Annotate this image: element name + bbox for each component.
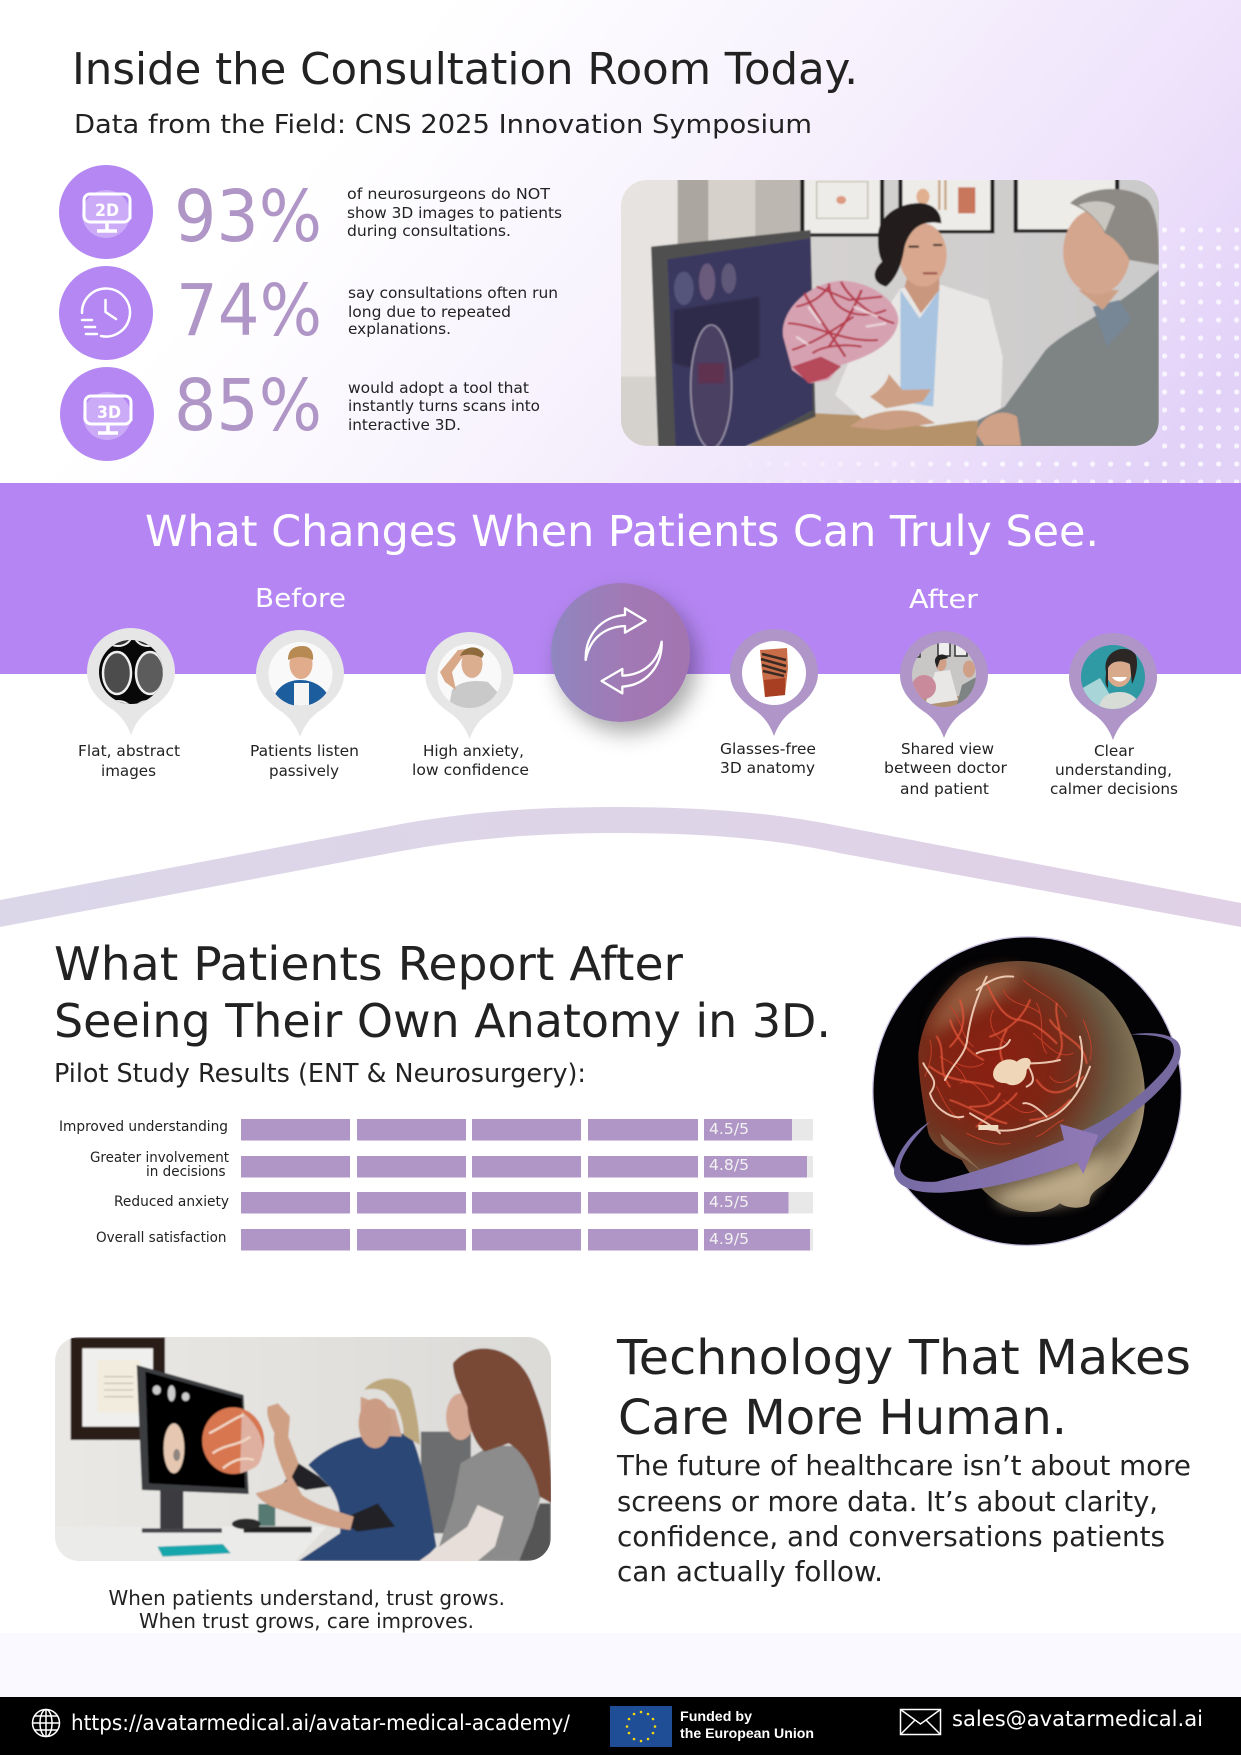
icon: 2D monitor: 2D xyxy=(95,201,119,221)
caption: Clear xyxy=(1094,742,1135,760)
caption xyxy=(1050,742,1178,798)
title: Inside the Consultation Room Today. xyxy=(72,44,858,95)
icon: globe xyxy=(32,1710,60,1736)
section heading: what patients report xyxy=(54,937,831,1048)
subheading: pilot study: Pilot Study Results (ENT & Neurosurgery): xyxy=(54,1059,586,1089)
caption xyxy=(884,740,1008,798)
caption xyxy=(412,742,529,779)
pin: anxious man xyxy=(426,632,514,739)
icon: 3D monitor xyxy=(60,367,154,461)
link: https://avatarmedical.ai/avatar-medical-academy/ xyxy=(71,1711,571,1736)
stat description: interactive 3D. xyxy=(348,416,461,434)
row: greater involvement: in decisions xyxy=(146,1164,226,1180)
paragraph xyxy=(616,1449,1191,1588)
caption: understanding, xyxy=(1055,761,1172,779)
photo: doctor explaining a brain model xyxy=(51,1333,557,1567)
purple band xyxy=(0,483,1241,674)
stat description xyxy=(348,284,558,338)
row: overall satisfaction xyxy=(96,1229,813,1250)
stat description: during consultations. xyxy=(347,222,511,240)
row: greater involvement: 4.8/5 xyxy=(709,1156,749,1174)
caption: trust message: When trust grows, care improves. xyxy=(139,1609,474,1633)
caption xyxy=(720,740,816,777)
paragraph: screens or more data. It’s about clarity, xyxy=(617,1485,1158,1518)
caption: Patients listen xyxy=(250,742,359,760)
row: improved understanding: 4.5/5 xyxy=(709,1120,749,1138)
caption: between doctor xyxy=(884,759,1008,777)
EU flag xyxy=(610,1706,672,1747)
stat: 85 percent xyxy=(60,364,540,461)
caption: Shared view xyxy=(901,740,994,758)
section heading: what patients report: Seeing Their Own Anatomy in 3D. xyxy=(54,994,831,1048)
row: overall satisfaction: Overall satisfaction xyxy=(96,1230,226,1246)
row: greater involvement: Greater involvement xyxy=(90,1150,229,1166)
label: before: Before xyxy=(255,584,346,614)
row: improved understanding: Improved understanding xyxy=(59,1119,228,1135)
section heading: what patients report: What Patients Report After xyxy=(54,937,683,991)
wave divider xyxy=(0,807,1241,927)
row: reduced anxiety: 4.5/5 xyxy=(709,1193,749,1211)
paragraph: confidence, and conversations patients xyxy=(617,1520,1165,1553)
stat description: explanations. xyxy=(348,320,451,338)
footer xyxy=(0,1697,1241,1755)
photo: doctor showing a 3D brain to a patient xyxy=(616,177,1164,450)
caption: and patient xyxy=(900,780,989,798)
icon: 2D monitor xyxy=(59,165,153,259)
paragraph: can actually follow. xyxy=(617,1555,883,1588)
before item: passive patient xyxy=(250,630,359,780)
pale strip above footer xyxy=(0,1633,1241,1697)
stat description: long due to repeated xyxy=(348,303,511,321)
stat description: show 3D images to patients xyxy=(347,204,562,222)
email: sales@avatarmedical.ai xyxy=(952,1707,1203,1732)
caption: Glasses-free xyxy=(720,740,816,758)
subtitle: Data from the Field: CNS 2025 Innovation Symposium xyxy=(74,110,812,140)
icon: 3D monitor: 3D xyxy=(97,403,121,423)
top section gradient background xyxy=(0,0,1241,483)
section heading: technology: Technology That Makes xyxy=(616,1330,1191,1386)
stat description: would adopt a tool that xyxy=(348,379,529,397)
row: reduced anxiety xyxy=(114,1192,813,1214)
pin: CT scan xyxy=(87,622,175,735)
pin: doctor and patient xyxy=(900,631,988,738)
section heading: technology: Care More Human. xyxy=(618,1390,1067,1446)
funded by text: the European Union xyxy=(680,1726,814,1741)
row: reduced anxiety: Reduced anxiety xyxy=(114,1194,229,1210)
after item: clear understanding xyxy=(1050,633,1178,798)
rating bar chart xyxy=(59,1119,813,1250)
section heading: technology xyxy=(616,1330,1191,1446)
after item: shared view xyxy=(884,631,1008,798)
caption: passively xyxy=(269,762,339,780)
stat: 74 percent xyxy=(59,266,558,360)
funded by text xyxy=(680,1709,814,1741)
icon: sync arrows xyxy=(586,608,662,693)
caption: Flat, abstract xyxy=(78,742,180,760)
stat value: 93% xyxy=(174,175,322,258)
stat description xyxy=(348,379,540,434)
after item: glasses-free anatomy xyxy=(720,629,818,777)
funded by text: Funded by xyxy=(680,1709,753,1724)
center transformation icon xyxy=(551,583,690,722)
stat description: of neurosurgeons do NOT xyxy=(347,185,551,203)
row: overall satisfaction: 4.9/5 xyxy=(709,1230,749,1248)
icon: clock xyxy=(59,266,153,360)
caption: images xyxy=(101,762,156,780)
caption: High anxiety, xyxy=(423,742,524,760)
pin: 3D torso xyxy=(730,629,818,736)
dot pattern xyxy=(820,228,1240,483)
before item: anxiety xyxy=(412,632,529,779)
image: 3D skull with vessels and rotation arrow xyxy=(872,936,1182,1246)
paragraph: The future of healthcare isn’t about more xyxy=(616,1449,1191,1482)
section heading: what changes: What Changes When Patients Can Truly See. xyxy=(145,507,1099,557)
caption: trust message xyxy=(108,1586,505,1633)
stat: 93 percent xyxy=(59,165,562,259)
caption xyxy=(250,742,359,780)
before item: flat images xyxy=(78,622,180,780)
stat description xyxy=(347,185,562,240)
caption: trust message: When patients understand, trust grows. xyxy=(108,1586,505,1610)
label: after: After xyxy=(909,585,978,615)
caption: low confidence xyxy=(412,761,529,779)
caption xyxy=(78,742,180,780)
stat value: 85% xyxy=(174,364,322,447)
caption: calmer decisions xyxy=(1050,780,1178,798)
stat description: say consultations often run xyxy=(348,284,558,302)
pin: smiling patient xyxy=(1069,633,1157,740)
stat description: instantly turns scans into xyxy=(348,397,540,415)
pin: man listening xyxy=(256,630,344,737)
row: improved understanding xyxy=(59,1119,813,1140)
row: greater involvement xyxy=(90,1150,813,1180)
caption: 3D anatomy xyxy=(720,759,815,777)
stat value: 74% xyxy=(176,269,322,352)
icon: envelope xyxy=(900,1710,940,1734)
